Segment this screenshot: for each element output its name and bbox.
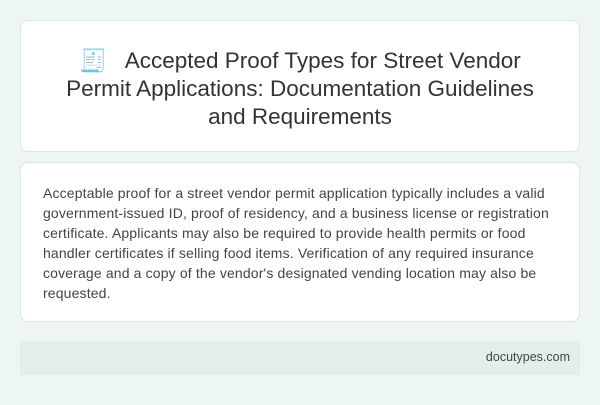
title card [20,20,580,152]
title [66,48,534,129]
footer: docutypes.com [486,350,570,364]
title: and Requirements [208,104,392,129]
description card [20,162,580,322]
footer [20,341,580,375]
title: 🧾 Accepted Proof Types for Street Vendor [79,48,521,73]
description text: Acceptable proof for a street vendor permit application typically includes a valid government-issued ID, proof of residency, and a business license or registration certificate. Applicants may also be required to provide health permits or food handler certificates if selling food items. Verification of any required insurance coverage and a copy of the vendor's designated vending location may also be requested. [43,185,549,301]
title: Permit Applications: Documentation Guidelines [66,76,534,101]
